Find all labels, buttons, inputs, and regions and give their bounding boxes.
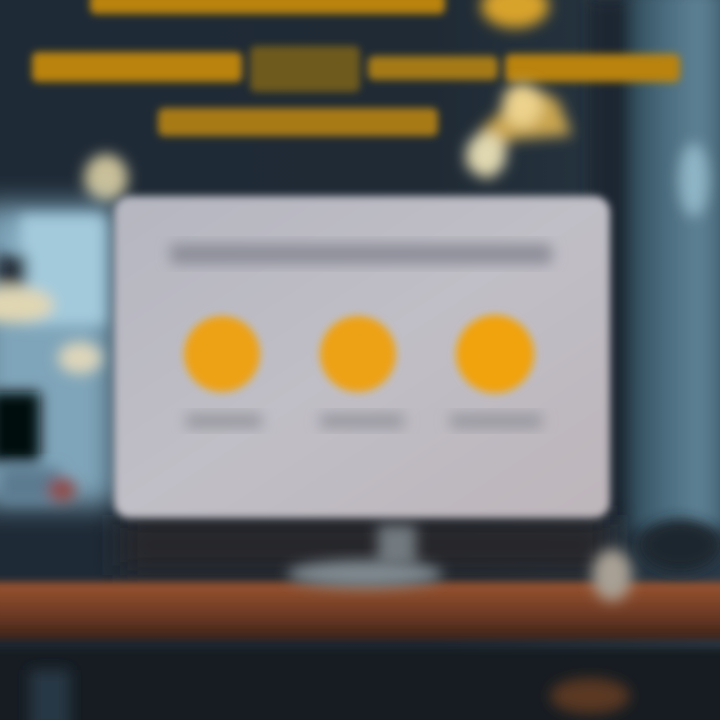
caption 2: [320, 414, 404, 428]
light bulb: top and lower highlights: [465, 0, 572, 180]
dark object right: [640, 519, 720, 571]
caption 1: [186, 414, 262, 428]
heading: blurred yellow title: [32, 0, 680, 136]
screen: [114, 196, 610, 518]
circle 2: [320, 316, 404, 428]
monitor: [114, 196, 610, 575]
left chair leg: [30, 670, 70, 720]
monitor base on desk: [287, 560, 443, 588]
monitor stand: [378, 525, 416, 565]
lamp and window at left: [0, 205, 115, 505]
desk object: [550, 678, 630, 714]
circle 1: [184, 316, 262, 428]
lower desk body: [0, 648, 720, 720]
curtain panel: [590, 0, 720, 530]
screen heading line: [170, 244, 552, 264]
monitor shadow: [120, 515, 610, 575]
caption 3: [450, 414, 542, 428]
desk: [0, 519, 720, 720]
small pendant light: [84, 154, 128, 202]
circle 3: [450, 315, 542, 428]
cup on desk: [592, 549, 632, 601]
